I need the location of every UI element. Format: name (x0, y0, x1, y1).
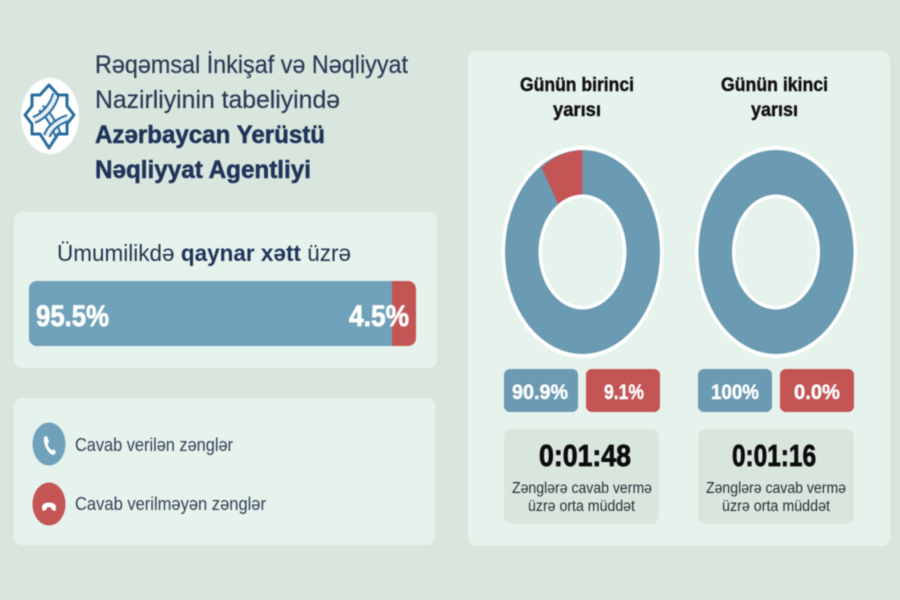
text: ministry line: Rəqəmsal İnkişaf və Nəqliyyat (95, 50, 408, 79)
legend item: unanswered calls: Cavab verilməyən zənglər (75, 494, 266, 514)
text: agency name: Azərbaycan Yerüstü (95, 121, 325, 149)
stat card: average response time 0:01:48: üzrə orta müddət (528, 498, 636, 515)
value pill: 0.0%: 0.0% (794, 381, 840, 404)
text: agency name (95, 121, 325, 184)
value pill: 100% (698, 369, 772, 412)
stat card: average response time 0:01:16: Zənglərə cavab vermə (706, 480, 846, 497)
value pill: 90.9%: 90.9% (512, 381, 568, 404)
stat card: average response time 0:01:48 (504, 429, 659, 524)
stacked bar: 95.5% answered, 4.5% unanswered (29, 281, 416, 346)
legend item: unanswered calls (32, 482, 266, 526)
stat card: average response time 0:01:16: 0:01:16 (732, 438, 816, 473)
heading: first half (520, 75, 634, 121)
icon: agency star logo (21, 78, 79, 154)
donut chart: 100% (695, 146, 857, 358)
heading: second half: Günün ikinci (721, 75, 828, 96)
donut chart: 90.9% and 9.1% (502, 146, 664, 358)
stacked bar: 95.5% answered, 4.5% unanswered: 95.5% (36, 300, 109, 333)
stat card: average response time 0:01:16: üzrə orta müddət (722, 498, 831, 515)
column: second half of the day (695, 75, 857, 524)
heading: overall hotline: Ümumilikdə qaynar xətt üzrə (57, 240, 351, 266)
text: agency name: Nəqliyyat Agentliyi (95, 156, 311, 184)
stat card: average response time 0:01:48: 0:01:48 (539, 438, 631, 473)
value pill: 100%: 100% (711, 381, 759, 404)
value pill: 9.1%: 9.1% (604, 381, 644, 404)
heading: second half: yarısı (751, 100, 798, 121)
text: ministry line: Nazirliyinin tabeliyində (95, 86, 340, 114)
column: first half of the day (502, 75, 664, 524)
legend item: answered calls (32, 422, 233, 466)
text: ministry line (95, 50, 408, 114)
panel: half-day comparison (468, 51, 890, 546)
panel: overall hotline (14, 212, 437, 368)
value pill: 90.9% (504, 369, 578, 412)
value pill: 0.0% (780, 369, 854, 412)
stat card: average response time 0:01:16 (698, 429, 854, 524)
heading: first half: Günün birinci (520, 75, 634, 96)
value pill: 9.1% (586, 369, 660, 412)
legend item: answered calls: Cavab verilən zənglər (75, 435, 233, 455)
panel: legend (14, 398, 435, 545)
heading: first half: yarısı (553, 100, 601, 121)
stat card: average response time 0:01:48: Zənglərə cavab vermə (512, 480, 652, 497)
stacked bar: 95.5% answered, 4.5% unanswered: 4.5% (349, 300, 409, 333)
header: agency logo and title (21, 50, 408, 184)
heading: second half (721, 75, 828, 121)
